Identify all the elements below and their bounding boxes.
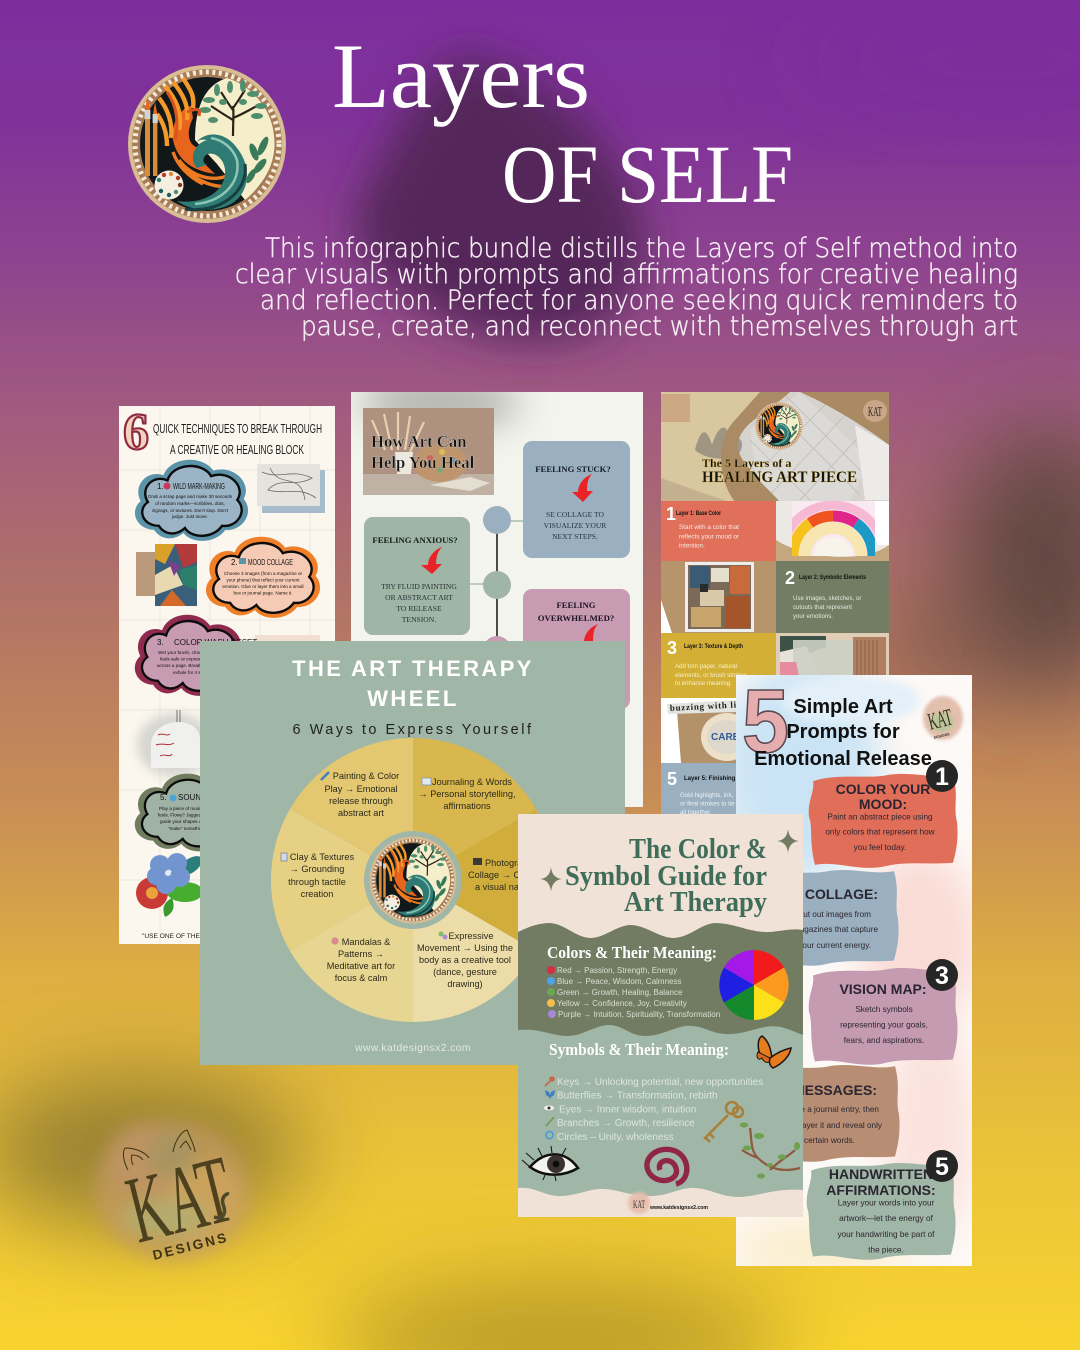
collage photo: [661, 561, 776, 633]
cloud 1: zigzags, or textures. Don't stop. Don't: [152, 508, 229, 513]
layer 3: [661, 633, 776, 698]
sparkles: [540, 829, 799, 892]
segment: painting: Painting & Color: [333, 771, 399, 781]
prompt 5: AFFIRMATIONS:: [826, 1182, 936, 1198]
segment: mandalas: [327, 937, 395, 983]
segment: clay: creation: [301, 889, 333, 899]
small logo: [755, 402, 803, 450]
panel heading: [153, 421, 322, 457]
hanging tag image: [137, 710, 213, 777]
badge 1: 1: [935, 763, 949, 791]
prompt 4: Write a journal entry, then: [786, 1105, 879, 1114]
cloud 2: box or journal page. Name it.: [234, 590, 292, 596]
small brand mark: KAT: [868, 405, 882, 420]
prompt 1: [809, 760, 958, 868]
cloud 3: across a page. Breathe in for 4,: [157, 663, 221, 668]
panel title: [754, 696, 932, 770]
cloud 5: Play a piece of music and draw how it: [159, 806, 237, 811]
list: symbols: [544, 1076, 763, 1143]
layer 2: [776, 561, 889, 633]
segment: clay: Clay & Textures: [290, 852, 354, 862]
heading: symbols: Symbols & Their Meaning:: [549, 1040, 729, 1059]
list: colors: Purple → Intuition, Spirituality, Transformation: [558, 1010, 720, 1019]
list: symbols: Eyes → Inner wisdom, intuition: [559, 1104, 696, 1116]
title: OF SELF: [502, 128, 793, 220]
panel title: [565, 834, 767, 918]
layer 5: all together.: [680, 809, 712, 816]
box: feeling anxious: TRY FLUID PAINTING: [381, 582, 457, 591]
prompt 2: your current energy.: [798, 941, 871, 950]
brand mark: KAT: [926, 705, 955, 736]
list: symbols: Keys → Unlocking potential, new opportunities: [557, 1077, 763, 1088]
heading: colors: Colors & Their Meaning:: [547, 943, 717, 962]
title: [332, 25, 793, 220]
eye: [522, 1146, 578, 1181]
cloud 2: 2.: [231, 558, 238, 567]
cloud 5: 5.: [160, 793, 167, 802]
cloud 5: guide your shapes without trying to: [160, 819, 231, 824]
segment: journaling: → Personal storytelling,: [418, 789, 516, 799]
big number 5: 5: [742, 672, 789, 772]
segment: painting: [321, 771, 399, 818]
badge 3: [926, 959, 958, 991]
prompt 1: MOOD:: [859, 796, 907, 812]
segment: movement: (dance, gesture: [433, 967, 497, 977]
segment: painting: release through: [329, 796, 393, 806]
panel title: Art Therapy: [624, 887, 767, 918]
prompt 3: VISION MAP:: [839, 981, 927, 997]
description paragraph: [235, 233, 1018, 342]
layer 4 photo: buzzing with li: [670, 700, 737, 713]
cloud 1: WILD MARK-MAKING: [173, 482, 225, 491]
cloud 3: exhale for 4 strokes.: [173, 670, 214, 675]
prompt 5: Layer your words into your: [838, 1198, 935, 1208]
panel title: [702, 458, 856, 482]
cloud 5: SOUND TRACE: [178, 793, 236, 802]
layer 2: cutouts that represent: [793, 604, 852, 611]
cloud 2: Choose 3 images (from a magazine or: [224, 571, 303, 576]
watercolor image: [255, 635, 320, 645]
collage header: [661, 392, 889, 502]
panel: 5 simple art prompts: [736, 675, 972, 1266]
layer 5: Gold highlights, ink,: [680, 792, 733, 799]
footer quote: "USE ONE OF THESE TOOLS WHEN YOU FEEL STUCK": [142, 933, 316, 940]
layer 5: or final strokes to tie it: [680, 800, 740, 808]
segment: movement: body as a creative tool: [419, 955, 511, 965]
panel title: WHEEL: [367, 686, 459, 711]
list: colors: [547, 966, 720, 1019]
panel: color and symbol guide: [518, 814, 803, 1217]
layer 2: your emotions.: [793, 613, 833, 620]
prompt 3: Sketch symbols: [855, 1005, 913, 1014]
layer 5: [661, 763, 736, 814]
segment: painting: abstract art: [338, 808, 384, 818]
panel title: How Art Can: [371, 432, 467, 451]
cloud 3: Wet your brush, choose a color that: [158, 650, 231, 655]
timeline: [470, 506, 523, 641]
segment: journaling: Journaling & Words: [432, 777, 512, 787]
box: feeling anxious: [364, 517, 470, 635]
layer 4 photo: CARE: [711, 732, 740, 743]
layer 2: Layer 2: Symbolic Elements: [799, 575, 867, 581]
panel heading: QUICK TECHNIQUES TO BREAK THROUGH: [153, 421, 322, 436]
segment: clay: [281, 852, 354, 899]
key: [704, 1102, 743, 1142]
layer 1: intention.: [679, 542, 705, 550]
segment: movement: Expressive: [449, 931, 493, 941]
cloud 2: [208, 539, 318, 616]
brand mark: DESIGNS: [933, 732, 951, 740]
layer 3: to enhance meaning.: [675, 680, 732, 687]
prompt 1: you feel today.: [854, 843, 906, 852]
color wheel: [719, 950, 789, 1020]
segment: mandalas: focus & calm: [335, 973, 388, 983]
prompt 5: [807, 1150, 958, 1260]
segment: movement: Movement → Using the: [417, 943, 513, 953]
segment: clay: → Grounding: [290, 864, 344, 874]
prompt 4: certain words.: [804, 1136, 855, 1145]
footer mark: [628, 1192, 708, 1214]
panel title: [371, 432, 475, 472]
cloud 3: 3.: [157, 638, 164, 647]
description paragraph: clear visuals with prompts and affirmations for creative healing: [235, 259, 1018, 290]
segment: photography: Photography &: [485, 858, 546, 868]
segment: mandalas: Mandalas &: [342, 937, 390, 947]
panel title: Help You Heal: [371, 453, 475, 472]
panel title: The Color &: [629, 834, 767, 865]
layer 2: 2: [785, 568, 795, 588]
cloud 1: 1.: [157, 482, 164, 491]
panel: art therapy wheel: [200, 641, 625, 1065]
cloud 5: feels. Flowy? Jagged? Soft? Let it: [158, 812, 228, 818]
panel title: Symbol Guide for: [565, 861, 767, 892]
list: symbols: Butterflies → Transformation, rebirth: [557, 1090, 718, 1102]
box: feeling stuck: SE COLLAGE TO: [546, 510, 604, 519]
panel title: The 5 Layers of a: [702, 456, 791, 470]
segment: journaling: [418, 777, 516, 811]
collage image: [136, 544, 197, 606]
panel title: Emotional Release: [754, 748, 932, 770]
panel title: Prompts for: [786, 721, 900, 743]
list: colors: Yellow → Confidence, Joy, Creativity: [557, 999, 687, 1008]
prompt 5: the piece.: [868, 1246, 904, 1254]
box: feeling anxious: OR ABSTRACT ART: [385, 593, 453, 602]
prompt 4: [735, 1065, 900, 1162]
prompt 5: HANDWRITTEN: [829, 1166, 933, 1182]
small brand mark: [863, 400, 887, 422]
segment: photography: Collage → Create: [468, 870, 541, 880]
badge 5: 5: [935, 1153, 949, 1181]
cloud 3: [137, 617, 257, 694]
segment: journaling: affirmations: [443, 801, 491, 811]
prompt 2: EMOTION COLLAGE:: [736, 886, 878, 902]
description paragraph: This infographic bundle distills the Layers of Self method into: [265, 233, 1018, 264]
wheel chart: [271, 738, 555, 1022]
butterfly: [757, 1036, 791, 1068]
box: feeling stuck: [523, 441, 630, 558]
list: colors: Blue → Peace, Wisdom, Calmness: [557, 977, 682, 986]
segment: painting: Play → Emotional: [324, 784, 398, 794]
prompt 2: magazines that capture: [793, 925, 878, 934]
cloud 3: COLOR WASH RESET: [174, 638, 257, 647]
prompt 3: [809, 959, 958, 1065]
panel title: Simple Art: [793, 696, 893, 718]
list: colors: Green → Growth, Healing, Balance: [557, 988, 683, 997]
cloud 2: emotion. Glue or layer them into a small: [222, 584, 304, 589]
prompt 5: artwork—let the energy of: [839, 1214, 934, 1223]
prompt 2: Cut out images from: [797, 910, 871, 919]
flowers: [136, 852, 205, 917]
box: feeling anxious: FEELING ANXIOUS?: [372, 535, 458, 545]
prompt 1: Paint an abstract piece using: [827, 812, 933, 822]
segment: photography: [468, 858, 546, 892]
layer 2: Use images, sketches, or: [793, 595, 861, 602]
brand mark: [923, 696, 963, 740]
layer 3: elements, or brush strokes: [675, 672, 747, 679]
box: feeling overwhelmed: OVERWHELMED?: [538, 613, 614, 623]
layer 5: Layer 5: Finishing Touches: [684, 776, 762, 782]
olive band: [518, 923, 803, 1036]
cream footer wave: [518, 1188, 803, 1217]
box: feeling anxious: TENSION.: [402, 615, 436, 624]
prompt 1: only colors that represent how: [825, 828, 935, 836]
subtitle: 6 Ways to Express Yourself: [293, 722, 533, 738]
cloud 2: MOOD COLLAGE: [248, 558, 293, 567]
layer 4 photo: [661, 698, 736, 763]
prompt 3: representing your goals,: [840, 1020, 928, 1030]
layer 3: Layer 3: Texture & Depth: [684, 644, 743, 650]
layer 1: reflects your mood or: [679, 534, 740, 540]
segment: photography: a visual narrative: [475, 882, 544, 892]
cloud 1: judge. Just move.: [171, 514, 208, 519]
box: feeling stuck: NEXT STEPS.: [552, 532, 598, 541]
footer mark: www.katdesignsx2.com: [649, 1205, 708, 1211]
footer mark: KAT: [633, 1197, 645, 1211]
panel: how art can help you heal: [351, 374, 643, 807]
layer 1: 1: [666, 504, 676, 524]
cloud 3: feels safe or expressive. Brush it: [160, 656, 227, 662]
box: feeling overwhelmed: FEELING: [556, 600, 596, 610]
prompt 1: COLOR YOUR: [836, 781, 930, 797]
list: symbols: Circles – Unity, wholeness: [557, 1132, 674, 1143]
brand logo bottom left: KAT: [117, 1135, 243, 1263]
prompt 5: your handwriting be part of: [838, 1230, 935, 1239]
big number 6: 6: [123, 404, 149, 461]
wheel centre logo: [370, 837, 456, 923]
panel title: THE ART THERAPY: [292, 656, 534, 681]
panel: 5 layers of a healing art piece: [661, 392, 889, 816]
cloud 5: [137, 775, 241, 850]
segment: mandalas: Patterns →: [338, 949, 384, 959]
website: www.katdesignsx2.com: [354, 1043, 471, 1054]
description paragraph: pause, create, and reconnect with themselves through art: [301, 311, 1018, 342]
segment: movement: [417, 931, 513, 989]
box: feeling stuck: VISUALIZE YOUR: [544, 521, 607, 530]
sage lower band: [518, 1020, 803, 1200]
panel heading: A CREATIVE OR HEALING BLOCK: [170, 442, 304, 457]
panel title: HEALING ART PIECE: [702, 469, 857, 486]
prompt 2: [736, 870, 899, 966]
badge 3: 3: [935, 962, 949, 990]
texture photo: [776, 633, 889, 675]
segment: clay: through tactile: [288, 877, 346, 887]
prompt 4: HIDDEN MESSAGES:: [735, 1082, 877, 1098]
cloud 1: [137, 462, 246, 539]
cloud 2: your phone) that reflect your current: [226, 578, 300, 582]
box: feeling stuck: FEELING STUCK?: [535, 464, 611, 474]
cloud 1: of random marks—scribbles, dots,: [155, 501, 225, 506]
brand logo bottom left: DESIGNS: [151, 1230, 230, 1263]
segment: mandalas: Meditative art for: [327, 961, 395, 971]
layer 3: 3: [667, 638, 677, 658]
box: feeling overwhelmed: [523, 589, 630, 709]
panel title: [292, 656, 534, 711]
box: feeling anxious: TO RELEASE: [396, 604, 442, 613]
layer 1: Start with a color that: [679, 524, 739, 531]
segment: movement: drawing): [447, 979, 483, 989]
list: symbols: Branches → Growth, resilience: [557, 1118, 695, 1129]
prompt 4: layer it and reveal only: [800, 1121, 883, 1130]
list: colors: Red → Passion, Strength, Energy: [557, 966, 677, 975]
layer 1: [661, 501, 776, 561]
title: Layers: [332, 25, 590, 127]
color swatch fan: [776, 501, 889, 561]
layer 5: 5: [667, 769, 677, 789]
photo: art supplies: [363, 408, 494, 495]
layer 1: Layer 1: Base Color: [676, 511, 722, 517]
badge 1: [926, 760, 958, 792]
prompt 3: fears, and aspirations.: [844, 1036, 924, 1045]
cloud 1: Grab a scrap page and make 30 seconds: [148, 494, 233, 499]
panel: 6 quick techniques: [119, 404, 335, 944]
badge 5: [926, 1150, 958, 1182]
description paragraph: and reflection. Perfect for anyone seeking quick reminders to: [260, 285, 1018, 316]
logo emblem: [128, 65, 286, 223]
branch: [740, 1122, 800, 1178]
cloud 5: "make" something.: [168, 826, 206, 831]
layer 3: Add torn paper, natural: [675, 663, 737, 670]
sketch image: [257, 464, 325, 513]
spiral: [647, 1149, 687, 1184]
